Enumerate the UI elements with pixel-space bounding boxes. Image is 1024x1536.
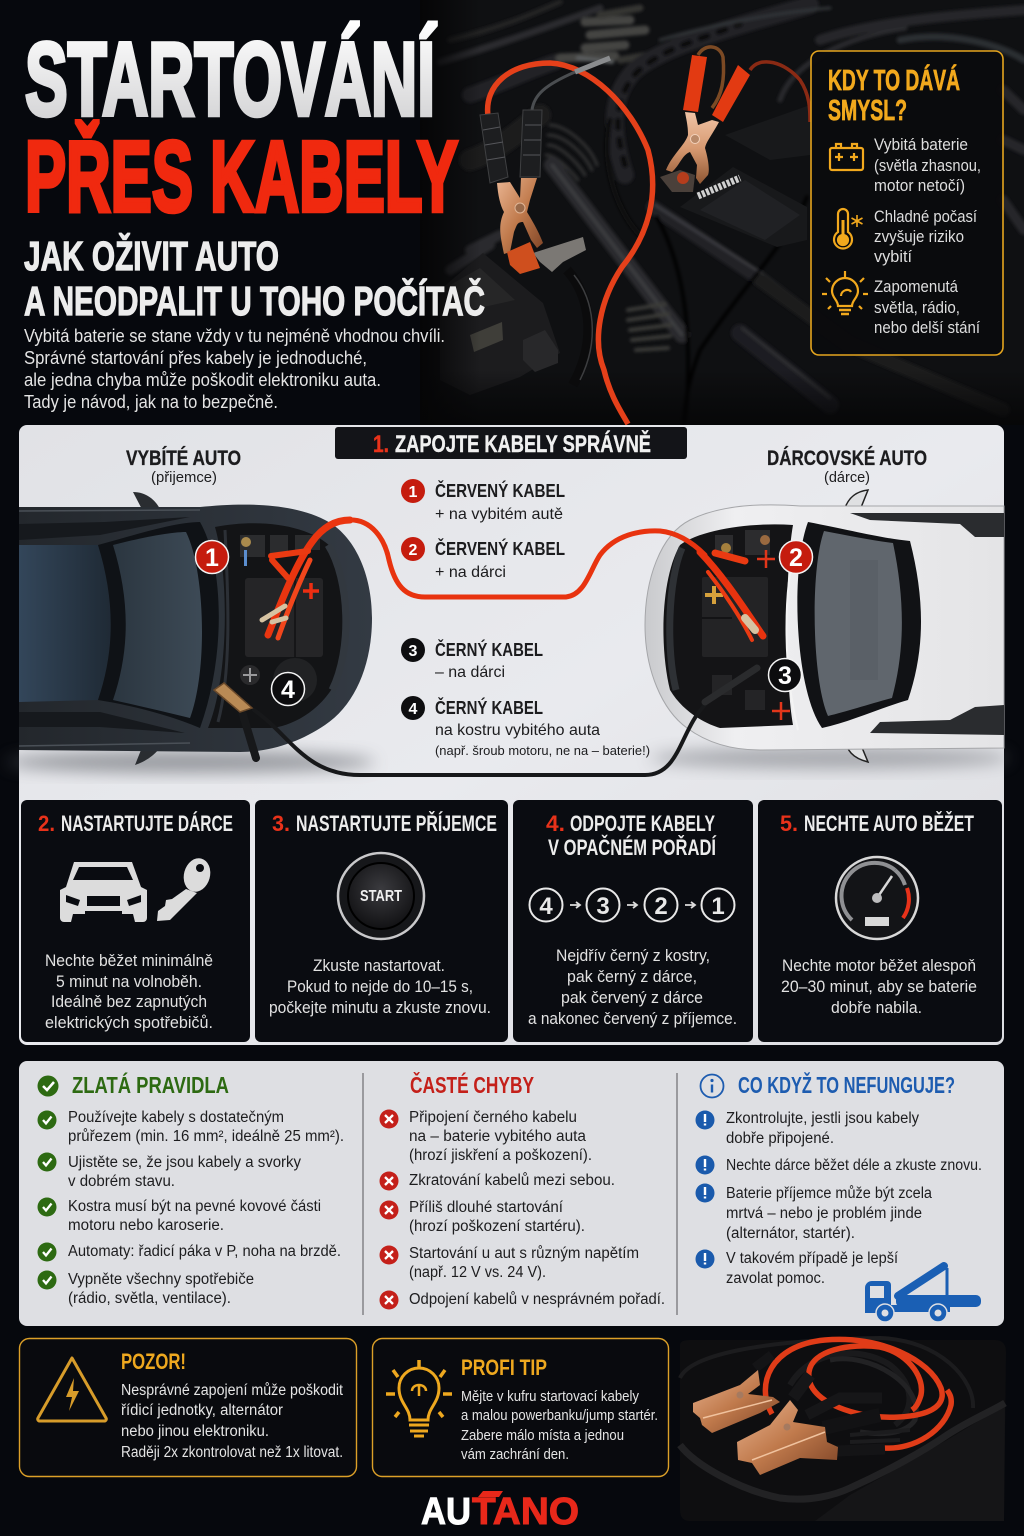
- troubleshooting text: zavolat pomoc.: [726, 1270, 825, 1287]
- heading: step 3: NASTARTUJTE PŘÍJEMCE: [296, 811, 497, 836]
- step 3: černý kabel na dárci: ČERNÝ KABEL: [435, 639, 543, 660]
- engine bay: [208, 523, 345, 728]
- subtitle: [24, 233, 485, 324]
- panel: step 2 nastartujte dárce: [21, 800, 250, 1042]
- title: PŘES KABELY: [25, 121, 458, 233]
- heading: pozor: POZOR!: [121, 1349, 186, 1374]
- column: časté chyby: [380, 1071, 665, 1310]
- engine bay: [663, 524, 793, 728]
- cross icons: [380, 1110, 398, 1310]
- panel: light background for diagram and steps: [19, 425, 1004, 1045]
- troubleshooting text: mrtvá – nebo je problém jinde: [726, 1205, 922, 1222]
- intro paragraph: Tady je návod, jak na to bezpečně.: [24, 392, 278, 412]
- badge: 3 on car: 3: [778, 662, 792, 690]
- column: co když to nefunguje: [696, 1071, 982, 1322]
- heading: step 5: [780, 811, 974, 836]
- intro paragraph: Správné startování přes kabely je jednoduché,: [24, 348, 367, 368]
- step 3: černý kabel na dárci: [401, 638, 543, 681]
- label: dárcovské auto: [767, 447, 927, 486]
- troubleshooting text: dobře připojené.: [726, 1130, 834, 1147]
- text: step 4: pak červený z dárce: [561, 989, 703, 1007]
- text: step 5: Nechte motor běžet alespoň: [782, 957, 976, 975]
- icon: reverse order sequence: 3: [596, 893, 610, 920]
- text: step 4: pak černý z dárce,: [567, 968, 697, 986]
- icon: reverse order sequence: 2: [654, 893, 668, 920]
- text: profi tip: Mějte v kufru startovací kabely: [461, 1389, 640, 1405]
- icon: key: [157, 855, 214, 921]
- mistakes text: na – baterie vybitého auta: [409, 1128, 586, 1145]
- text: profi tip: Zabere málo místa a jednou: [461, 1428, 624, 1444]
- text: profi tip: [461, 1389, 658, 1463]
- mistakes text: Odpojení kabelů v nesprávném pořadí.: [409, 1291, 665, 1308]
- text: zapomenutá světla: světla, rádio,: [874, 299, 960, 317]
- intro paragraph: ale jedna chyba může poškodit elektroniku auta.: [24, 370, 381, 390]
- text: pozor: [121, 1382, 344, 1461]
- label: vybité auto: [126, 447, 241, 486]
- text: pozor: Raději 2x zkontrolovat než 1x litovat.: [121, 1444, 343, 1461]
- icon: start button: START: [360, 888, 402, 905]
- text: step 5: [781, 957, 977, 1017]
- subtitle: A NEODPALIT U TOHO POČÍTAČ: [24, 278, 485, 324]
- mistakes text: Zkratování kabelů mezi sebou.: [409, 1172, 615, 1189]
- mistakes text: [409, 1109, 665, 1308]
- step 4: černý kabel na kostru: na kostru vybitého auta: [435, 722, 600, 739]
- icon: reverse order sequence: [530, 888, 734, 922]
- rules text: motoru nebo karoserie.: [68, 1217, 224, 1234]
- text: step 5: dobře nabila.: [831, 999, 922, 1017]
- text: vybitá baterie: (světla zhasnou,: [874, 157, 981, 175]
- plus mark: [303, 583, 319, 599]
- text: step 5: 20–30 minut, aby se baterie: [781, 978, 977, 996]
- step 4: černý kabel na kostru: ČERNÝ KABEL: [435, 697, 543, 718]
- title: STARTOVÁNÍ: [25, 22, 437, 138]
- panel: rules, mistakes, troubleshooting: [19, 1061, 1004, 1326]
- rules text: Používejte kabely s dostatečným: [68, 1109, 284, 1126]
- step 1: červený kabel na vybitém autě: 1: [409, 484, 418, 501]
- step 2: červený kabel na dárci: ČERVENÝ KABEL: [435, 538, 565, 559]
- mistakes text: Příliš dlouhé startování: [409, 1199, 564, 1216]
- text: pozor: Nesprávné zapojení může poškodit: [121, 1382, 344, 1399]
- column dividers: [363, 1073, 677, 1315]
- heading: step 3: [272, 811, 497, 836]
- heading: zlatá pravidla: [38, 1071, 229, 1098]
- text: step 3: Pokud to nejde do 10–15 s,: [287, 978, 473, 996]
- badge: 2 on car: 2: [789, 544, 803, 572]
- step 2: červený kabel na dárci: + na dárci: [435, 564, 506, 581]
- text: chladné počasí: zvyšuje riziko: [874, 228, 964, 246]
- rules text: průřezem (min. 16 mm², ideálně 25 mm²).: [68, 1128, 344, 1145]
- step 3: černý kabel na dárci: 3: [409, 643, 418, 660]
- heading: kdy to dává smysl: SMYSL?: [828, 95, 907, 127]
- callout: pozor: [20, 1338, 356, 1476]
- text: zapomenutá světla: nebo delší stání: [874, 319, 980, 337]
- heading: profi tip: PROFI TIP: [461, 1355, 547, 1380]
- photo: red cable with left clamp: [480, 58, 653, 424]
- heading: step 2: 2.: [38, 811, 55, 836]
- text: chladné počasí: vybití: [874, 248, 912, 266]
- step 4: černý kabel na kostru: 4: [409, 701, 418, 718]
- step 2: červený kabel na dárci: [401, 537, 565, 581]
- text: step 2: Ideálně bez zapnutých: [51, 993, 207, 1011]
- badge: 2 on car: [780, 540, 812, 574]
- title: [25, 22, 458, 233]
- rules text: [68, 1109, 344, 1307]
- text: chladné počasí: Chladné počasí: [874, 208, 977, 226]
- text: step 2: [45, 952, 213, 1032]
- mistakes text: (hrozí poškození startéru).: [409, 1218, 585, 1235]
- photo: right red clamp: [660, 47, 810, 192]
- label: vybité auto: (přijemce): [151, 469, 217, 486]
- step 1: červený kabel na vybitém autě: ČERVENÝ KABEL: [435, 480, 565, 501]
- right battery: [680, 167, 807, 247]
- heading: step 4: 4.: [546, 811, 565, 836]
- label: dárcovské auto: (dárce): [824, 469, 870, 486]
- rules text: v dobrém stavu.: [68, 1173, 175, 1190]
- troubleshooting text: Zkontrolujte, jestli jsou kabely: [726, 1110, 919, 1127]
- text: step 4: [528, 947, 737, 1028]
- heading: step 2: NASTARTUJTE DÁRCE: [61, 811, 233, 836]
- rules text: (rádio, světla, ventilace).: [68, 1290, 231, 1307]
- badge: 4 on car: [272, 672, 304, 706]
- text: chladné počasí: [874, 208, 977, 266]
- step 1: červený kabel na vybitém autě: + na vybitém autě: [435, 506, 563, 523]
- text: step 2: Nechte běžet minimálně: [45, 952, 213, 970]
- heading: step 2: [38, 811, 233, 836]
- text: step 2: 5 minut na volnoběh.: [56, 973, 202, 991]
- logo: autano: TANO: [472, 1491, 579, 1533]
- intro paragraph: Vybitá baterie se stane vždy v tu nejméně vhodnou chvíli.: [24, 326, 445, 346]
- info icons: [696, 1110, 714, 1268]
- heading: co když to nefunguje: [700, 1071, 955, 1098]
- step 4: černý kabel na kostru: [401, 696, 650, 758]
- intro paragraph: [24, 326, 445, 412]
- troubleshooting text: (alternátor, startér).: [726, 1225, 855, 1242]
- text: profi tip: a malou powerbanku/jump startér.: [461, 1408, 658, 1424]
- step 2: červený kabel na dárci: 2: [409, 542, 418, 559]
- heading: step 4: V OPAČNÉM POŘADÍ: [548, 835, 717, 860]
- troubleshooting text: [726, 1110, 982, 1287]
- step 4: černý kabel na kostru: (např. šroub motoru, ne na – baterie!): [435, 743, 650, 758]
- rules text: Ujistěte se, že jsou kabely a svorky: [68, 1154, 301, 1171]
- rules text: Vypněte všechny spotřebiče: [68, 1271, 254, 1288]
- text: profi tip: vám zachrání den.: [461, 1447, 569, 1463]
- callout: profi tip: [372, 1338, 668, 1476]
- windshield: [797, 522, 921, 728]
- heading: zlatá pravidla: ZLATÁ PRAVIDLA: [72, 1071, 229, 1098]
- rules text: Automaty: řadicí páka v P, noha na brzdě.: [68, 1243, 341, 1260]
- rules text: Kostra musí být na pevné kovové části: [68, 1198, 321, 1215]
- mistakes text: (např. 12 V vs. 24 V).: [409, 1264, 546, 1281]
- panel: step 3 nastartujte příjemce: [255, 800, 508, 1042]
- text: vybitá baterie: [874, 136, 981, 195]
- heading: step 4: ODPOJTE KABELY: [570, 811, 715, 836]
- heading: step 4: [546, 811, 717, 860]
- panel: step 4 odpojte kabely: [513, 800, 753, 1042]
- panel: step 5 nechte auto běžet: [758, 800, 1002, 1042]
- left battery: [440, 253, 560, 395]
- troubleshooting text: V takovém případě je lepší: [726, 1250, 899, 1267]
- heading: step 3: 3.: [272, 811, 290, 836]
- logo: autano: AU: [421, 1491, 471, 1533]
- text: zapomenutá světla: [874, 278, 980, 337]
- icon: light bulb: [386, 1360, 452, 1436]
- icon: thermometer: [834, 209, 862, 248]
- text: pozor: nebo jinou elektroniku.: [121, 1423, 269, 1440]
- text: zapomenutá světla: Zapomenutá: [874, 278, 959, 296]
- step 1: červený kabel na vybitém autě: [401, 479, 565, 523]
- heading: kdy to dává smysl: [828, 63, 960, 127]
- icon: gauge: [836, 857, 918, 939]
- text: step 2: elektrických spotřebičů.: [45, 1014, 213, 1032]
- icon: warning triangle: [38, 1358, 106, 1421]
- car: dárcovské auto (silver): [645, 490, 1010, 769]
- badge: 1 on car: 1: [205, 544, 219, 572]
- text: vybitá baterie: motor netočí): [874, 177, 965, 195]
- check icons: [38, 1110, 56, 1290]
- text: vybitá baterie: Vybitá baterie: [874, 136, 968, 154]
- mistakes text: Připojení černého kabelu: [409, 1109, 577, 1126]
- photo: coiled jumper cables in bag: [680, 1338, 1006, 1521]
- panel: kdy to dává smysl: [811, 51, 1003, 355]
- text: step 4: a nakonec červený z příjemce.: [528, 1010, 737, 1028]
- step 3: černý kabel na dárci: – na dárci: [435, 664, 505, 681]
- heading: zapojte kabely správně: ZAPOJTE KABELY SPRÁVNĚ: [395, 430, 651, 458]
- black cable between cars: [214, 668, 757, 775]
- heading: zapojte kabely správně: [335, 427, 687, 459]
- text: step 4: Nejdřív černý z kostry,: [556, 947, 710, 965]
- icon: reverse order sequence: 1: [711, 893, 725, 920]
- icon: light bulb: [822, 271, 868, 314]
- badge: 1 on car: [196, 540, 228, 574]
- mistakes text: (hrozí jiskření a poškození).: [409, 1147, 592, 1164]
- subtitle: JAK OŽIVIT AUTO: [24, 233, 279, 279]
- car: vybité auto (dark): [5, 492, 375, 773]
- troubleshooting text: Baterie příjemce může být zcela: [726, 1185, 932, 1202]
- heading: časté chyby: ČASTÉ CHYBY: [410, 1071, 534, 1098]
- column: zlatá pravidla: [38, 1071, 344, 1307]
- icon: battery: [830, 144, 863, 170]
- text: step 3: počkejte minutu a zkuste znovu.: [269, 999, 491, 1017]
- heading: zapojte kabely správně: 1.: [373, 431, 389, 458]
- label: dárcovské auto: DÁRCOVSKÉ AUTO: [767, 447, 927, 470]
- photo: engine bay with jumper cables: [420, 0, 1024, 425]
- badge: 3 on car: [768, 658, 802, 692]
- red cable between cars: [262, 520, 763, 640]
- icon: car front: [60, 862, 147, 922]
- icon: reverse order sequence: 4: [539, 893, 553, 920]
- text: step 3: [269, 957, 491, 1017]
- label: vybité auto: VYBÍTÉ AUTO: [126, 447, 241, 470]
- badge: 4 on car: 4: [281, 676, 295, 704]
- logo: autano: [421, 1491, 579, 1533]
- icon: tow truck: [865, 1266, 981, 1322]
- troubleshooting text: Nechte dárce běžet déle a zkuste znovu.: [726, 1157, 982, 1174]
- text: pozor: řídicí jednotky, alternátor: [121, 1402, 283, 1419]
- icon: start button: [338, 853, 424, 939]
- mistakes text: Startování u aut s různým napětím: [409, 1245, 639, 1262]
- text: step 3: Zkuste nastartovat.: [313, 957, 445, 975]
- heading: step 5: 5.: [780, 811, 798, 836]
- heading: kdy to dává smysl: KDY TO DÁVÁ: [828, 63, 960, 97]
